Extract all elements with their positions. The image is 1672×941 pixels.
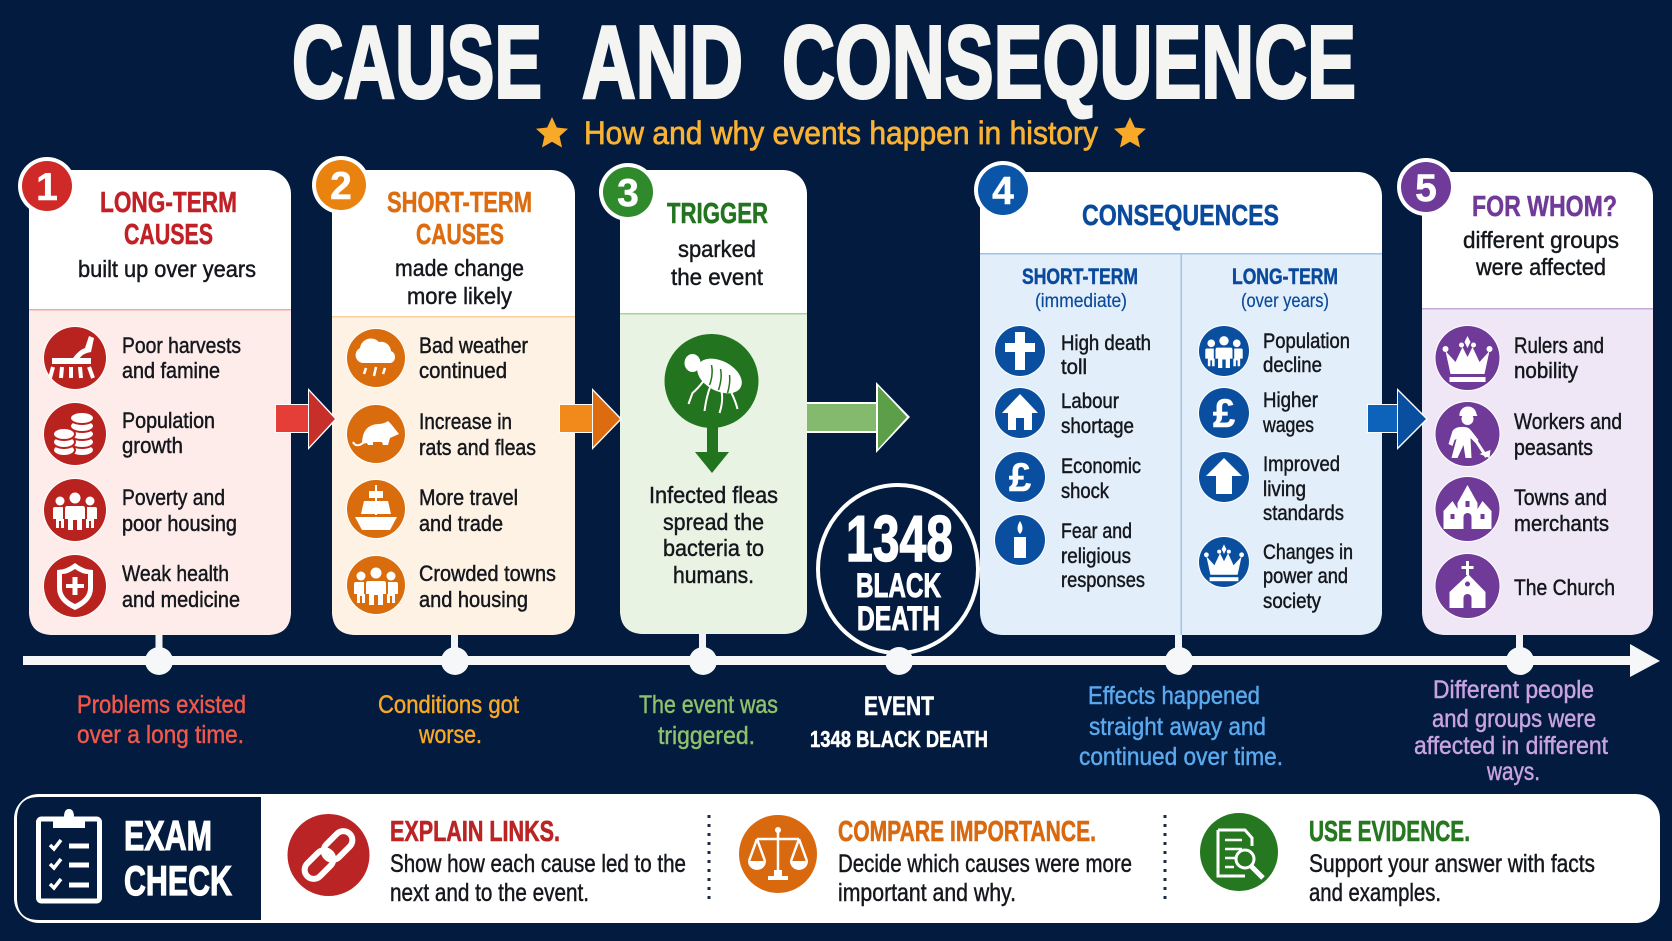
panel: consequences [980, 172, 1382, 635]
title: CONSEQUENCE [782, 4, 1356, 120]
panel: trigger [620, 170, 807, 634]
icon: crowd [346, 555, 406, 615]
item: travel: and trade [419, 511, 503, 536]
icon: church [1434, 553, 1500, 619]
icon: link [288, 814, 370, 896]
heading: short-term causes: CAUSES [416, 219, 504, 251]
panel: for whom [1422, 172, 1653, 635]
tip: explain links [390, 816, 686, 907]
tip: compare importance: important and why. [838, 879, 1016, 907]
timeline note: long-term [77, 691, 246, 749]
item: rats and fleas: rats and fleas [419, 435, 536, 460]
timeline note: short-term: Conditions got [378, 691, 519, 719]
event circle: 1348 black death [818, 485, 978, 653]
icon: people [43, 478, 107, 542]
timeline note: trigger: triggered. [658, 722, 755, 750]
item: workers: Workers and [1514, 409, 1622, 434]
tip: compare importance: Decide which causes were more [838, 850, 1132, 878]
icon: rain cloud [346, 328, 406, 388]
heading: trigger [667, 198, 768, 290]
item: bad weather: Bad weather [419, 333, 528, 358]
icon: up arrow [1198, 451, 1250, 503]
timeline note: short-term: worse. [418, 721, 482, 749]
icon: crown power [1198, 536, 1250, 588]
heading: trigger: the event [671, 264, 764, 290]
heading: for whom: FOR WHOM? [1472, 191, 1617, 223]
icon: clipboard [38, 809, 100, 901]
item: population growth [122, 408, 215, 458]
heading: short-term causes: more likely [407, 283, 512, 309]
timeline note: for whom [1414, 676, 1608, 786]
event circle: 1348 black death: DEATH [857, 600, 940, 638]
icon: crown [1434, 325, 1500, 391]
badge 5: 5 [1415, 167, 1437, 210]
item: crowded towns: Crowded towns [419, 561, 556, 586]
tip: use evidence: USE EVIDENCE. [1309, 816, 1470, 848]
item: rulers [1514, 333, 1604, 383]
item: economic shock [1061, 455, 1141, 503]
item: fear: religious [1061, 545, 1131, 568]
subheading: short-term: SHORT-TERM [1022, 264, 1138, 289]
item: higher wages: wages [1262, 414, 1314, 437]
timeline note: for whom: affected in different [1414, 732, 1608, 760]
item: power: society [1263, 590, 1321, 613]
timeline note: short-term [378, 691, 519, 749]
text: infected fleas: bacteria to [663, 535, 764, 561]
icon: plough [43, 326, 107, 390]
subheading: short-term: (immediate) [1035, 291, 1127, 312]
item: poverty [122, 485, 237, 536]
item: fear: Fear and [1061, 520, 1132, 543]
badge 1: 1 [36, 166, 58, 209]
item: economic shock: Economic [1061, 455, 1141, 478]
heading: for whom [1463, 191, 1619, 280]
timeline note: long-term: over a long time. [77, 721, 244, 749]
item: poor harvests: and famine [122, 358, 220, 383]
badge 1 [18, 157, 76, 215]
item: towns: merchants [1514, 511, 1609, 536]
badge 2 [312, 156, 370, 214]
tip: use evidence: Support your answer with facts [1309, 850, 1595, 878]
item: rats and fleas: Increase in [419, 409, 512, 434]
timeline note: consequences: Effects happened [1088, 682, 1260, 710]
item: labour shortage: shortage [1061, 415, 1134, 438]
tip: compare importance: COMPARE IMPORTANCE. [838, 816, 1096, 848]
item: improved living: living [1263, 478, 1306, 501]
item: economic shock: shock [1061, 480, 1109, 503]
tip: use evidence: and examples. [1309, 879, 1441, 907]
heading: exam check: EXAM [124, 812, 212, 859]
tip: use evidence [1309, 816, 1595, 907]
item: population decline [1263, 330, 1350, 377]
badge 3: 3 [617, 172, 639, 215]
icon: pound wages: £ [1213, 392, 1235, 436]
item: workers [1514, 409, 1622, 460]
item: bad weather: continued [419, 358, 507, 383]
item: towns [1514, 485, 1609, 536]
panel: exam check [15, 795, 1659, 922]
icon: ship [346, 479, 406, 539]
item: poverty: Poverty and [122, 485, 225, 510]
item: high death toll: High death [1061, 332, 1151, 355]
timeline note: trigger: The event was [639, 691, 778, 719]
panel: short-term causes [332, 170, 575, 635]
heading: consequences: CONSEQUENCES [1082, 200, 1279, 232]
timeline note: for whom: and groups were [1432, 705, 1596, 733]
tip: explain links: next and to the event. [390, 879, 589, 907]
item: improved living [1263, 453, 1344, 525]
timeline note: for whom: ways. [1486, 758, 1540, 786]
item: improved living: Improved [1263, 453, 1340, 476]
icon: town [1434, 476, 1500, 542]
title: CAUSE [292, 4, 542, 120]
icon: worker [1434, 401, 1500, 467]
timeline note: long-term: Problems existed [77, 691, 246, 719]
item: fear: responses [1061, 569, 1145, 592]
heading: long-term causes: CAUSES [124, 219, 213, 251]
subheading: long-term: (over years) [1241, 291, 1329, 312]
icon: flea [664, 334, 758, 473]
icon: shield [43, 554, 107, 618]
icon: pound: £ [1009, 456, 1031, 500]
icon: evidence [1200, 813, 1278, 891]
badge 5 [1397, 158, 1455, 216]
timeline note: for whom: Different people [1433, 676, 1594, 704]
item: travel: More travel [419, 485, 518, 510]
icon: candle [994, 514, 1046, 566]
timeline note: event [810, 691, 988, 752]
subheading: long-term: LONG-TERM [1232, 264, 1338, 289]
timeline note: consequences: straight away and [1089, 713, 1266, 741]
icon: pound wages [1198, 387, 1250, 439]
item: crowded towns: and housing [419, 587, 528, 612]
text: infected fleas [649, 482, 778, 588]
item: labour shortage: Labour [1061, 390, 1119, 413]
item: weak health [122, 561, 240, 612]
icon: cross [994, 325, 1046, 377]
heading: long-term causes [78, 187, 256, 282]
item: population decline: Population [1263, 330, 1350, 353]
timeline [23, 634, 1660, 677]
item: bad weather [419, 333, 528, 383]
item: towns: Towns and [1514, 485, 1607, 510]
heading: trigger: sparked [678, 236, 756, 262]
text: infected fleas: humans. [673, 562, 754, 588]
arrow: causes 2 to 3 [559, 388, 622, 450]
heading: trigger: TRIGGER [667, 198, 768, 230]
item: population decline: decline [1263, 354, 1322, 377]
subheading: long-term [1232, 264, 1338, 312]
arrow: consequences to groups [1367, 388, 1428, 450]
heading: long-term causes: built up over years [78, 256, 256, 282]
badge 2: 2 [330, 165, 352, 208]
item: rats and fleas [419, 409, 536, 460]
heading: exam check: CHECK [124, 857, 232, 904]
item: power: Changes in [1263, 541, 1353, 564]
item: higher wages [1262, 389, 1318, 437]
heading: for whom: were affected [1475, 254, 1606, 280]
text: infected fleas: Infected fleas [649, 482, 778, 508]
icon: pound [994, 451, 1046, 503]
title: AND [582, 4, 743, 120]
icon: rat [346, 404, 406, 464]
item: higher wages: Higher [1263, 389, 1318, 412]
heading: short-term causes: SHORT-TERM [387, 187, 532, 219]
subheading: short-term [1022, 264, 1138, 312]
tip: explain links: Show how each cause led to the [390, 850, 686, 878]
event dot [885, 647, 913, 675]
heading: long-term causes: LONG-TERM [100, 187, 237, 219]
heading: exam check [124, 812, 232, 904]
item: population growth: Population [122, 408, 215, 433]
badge 4: 4 [992, 170, 1014, 213]
timeline note: consequences: continued over time. [1079, 743, 1283, 771]
heading: short-term causes: made change [395, 255, 524, 281]
item: improved living: standards [1263, 502, 1344, 525]
arrow: trigger to consequences [807, 382, 910, 453]
item: church: The Church [1514, 575, 1615, 600]
item: rulers: Rulers and [1514, 333, 1604, 358]
tip: compare importance [838, 816, 1132, 907]
item: crowded towns [419, 561, 556, 612]
icon: coins [43, 402, 107, 466]
item: power: power and [1263, 565, 1348, 588]
tip: explain links: EXPLAIN LINKS. [390, 816, 560, 848]
item: poverty: poor housing [122, 511, 237, 536]
item: poor harvests [122, 333, 241, 383]
item: labour shortage [1061, 390, 1134, 438]
heading: short-term causes [387, 187, 532, 309]
panel: long-term causes [29, 170, 291, 635]
text: infected fleas: spread the [663, 509, 764, 535]
badge 3 [599, 163, 657, 221]
icon: house [994, 387, 1046, 439]
timeline note: event: 1348 BLACK DEATH [810, 726, 988, 752]
icon: population [1198, 325, 1250, 377]
icon: scales [739, 815, 817, 893]
item: population growth: growth [122, 433, 183, 458]
heading: for whom: different groups [1463, 227, 1619, 253]
timeline note: consequences [1079, 682, 1283, 771]
item: weak health: and medicine [122, 587, 240, 612]
event circle: 1348 black death: 1348 [846, 502, 953, 575]
item: poor harvests: Poor harvests [122, 333, 241, 358]
item: weak health: Weak health [122, 561, 229, 586]
title [292, 4, 1356, 120]
timeline note: event: EVENT [864, 691, 934, 721]
arrow: causes 1 to 2 [275, 388, 337, 450]
event circle: 1348 black death: BLACK [856, 567, 941, 605]
item: fear [1061, 520, 1145, 592]
subtitle: How and why events happen in history [584, 115, 1098, 151]
item: workers: peasants [1514, 435, 1593, 460]
badge 4 [974, 161, 1032, 219]
item: high death toll [1061, 332, 1151, 379]
item: power [1263, 541, 1353, 613]
item: travel [419, 485, 518, 536]
timeline note: trigger [639, 691, 778, 750]
item: rulers: nobility [1514, 358, 1578, 383]
item: high death toll: toll [1061, 356, 1087, 379]
